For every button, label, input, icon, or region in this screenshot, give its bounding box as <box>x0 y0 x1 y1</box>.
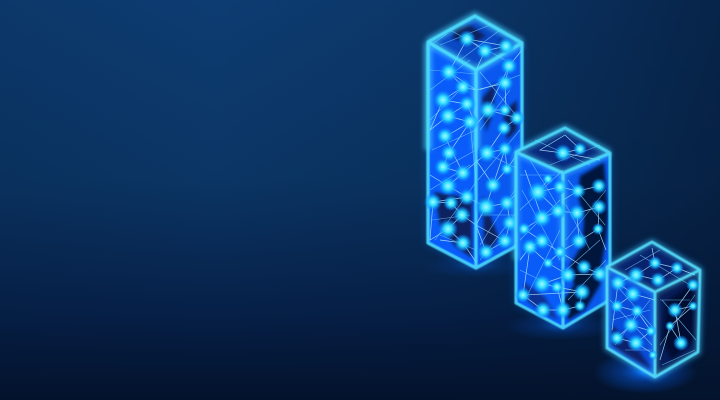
bar 2 nodes <box>515 142 609 319</box>
bar 3 mesh <box>612 248 695 360</box>
bar 2: medium <box>515 128 610 328</box>
bar 1 edges <box>428 16 522 150</box>
bar 2 top face <box>516 128 610 173</box>
bar 1 top face <box>428 16 522 70</box>
bar 3 nodes <box>609 256 700 360</box>
bar 1 mesh <box>430 39 522 262</box>
bar 2 right face <box>563 153 610 328</box>
bar 3 right face <box>655 270 700 377</box>
bar 2 mesh <box>520 135 606 310</box>
bar 3: short <box>607 242 700 377</box>
bar 2 edges <box>516 128 610 260</box>
bar 3 edges <box>607 242 700 377</box>
glow on floor <box>421 254 697 394</box>
bar 3 left face <box>607 267 655 377</box>
bar 1 left face <box>428 42 476 268</box>
bar 2 left face <box>516 152 563 328</box>
bar 1: tall <box>424 16 525 268</box>
bar 3 top face <box>607 242 700 292</box>
bar 1 right face <box>476 43 522 268</box>
bar 1 nodes <box>424 30 525 261</box>
